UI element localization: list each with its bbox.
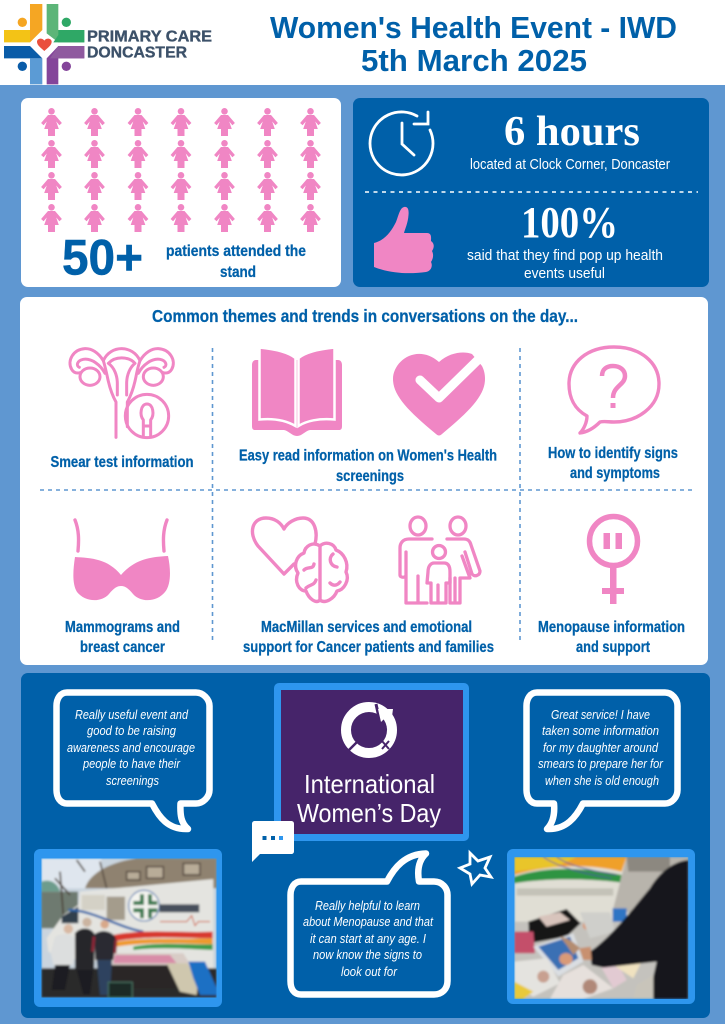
icon: bra [73,520,170,600]
icon: open book [252,348,342,436]
quote bubble: useful event: awareness and encourage [67,740,195,755]
caption: patients attended the stand: stand [220,264,256,281]
title: Women's Health Event - IWD [270,10,677,45]
quote bubble: useful event: screenings [106,773,159,788]
quote bubble: great service [526,692,678,829]
heading: common themes: Common themes and trends in conversations on the day... [152,306,578,326]
icon: thumbs up [374,207,434,273]
text: International Women's Day: Women’s Day [297,798,441,828]
quote bubble: great service: taken some information [542,723,659,738]
label: signs and symptoms: How to identify signs [548,445,678,462]
logo: Primary Care Doncaster: PRIMARY CARE [87,28,212,46]
title [270,10,677,78]
quote bubble: great service: smears to prepare her for [538,756,664,771]
quote bubble: useful event: people to have their [82,756,181,771]
icon: clock [370,112,433,175]
label: mammograms: Mammograms and [65,619,180,636]
icon: chat bubble [252,821,294,862]
quote bubble: menopause [290,854,448,994]
quote bubble: useful event [56,692,210,829]
stat: 100%: 100% [521,198,618,247]
logo: Primary Care Doncaster [4,4,212,84]
text: International Women's Day: International [304,769,435,799]
quote bubble: menopause: about Menopause and that [303,914,434,929]
caption: patients attended the stand [166,243,306,281]
quote bubble: great service: when she is old enough [545,773,659,788]
logo: Primary Care Doncaster: DONCASTER [87,44,187,61]
quote bubble: menopause: now know the signs to [313,947,422,962]
title: 5th March 2025 [361,43,587,78]
stat: 6 hours: 6 hours [504,109,640,155]
quote bubble: menopause: Really helpful to learn [315,898,420,913]
label: menopause: and support [576,639,650,656]
quote bubble: great service: Great service! I have [551,707,650,722]
photo: leaflets on stand [507,849,695,1004]
label: MacMillan services [243,619,494,656]
label: menopause [538,619,685,656]
caption: pop up events useful [467,248,663,282]
photo: van and staff [34,849,222,1007]
quote bubble: menopause: it can start at any age. I [310,931,426,946]
label: MacMillan services: support for Cancer patients and families [243,639,494,656]
quote bubble: useful event: Really useful event and [75,707,189,722]
caption: patients attended the stand: patients attended the [166,243,306,260]
label: mammograms: breast cancer [80,639,165,656]
panel: patients attended [21,98,341,287]
quote bubble: menopause: look out for [341,964,398,979]
icon: speech bubble question [569,347,659,433]
quote bubble: great service: for my daughter around [543,740,659,755]
icon: IWD symbol [346,704,393,753]
label: MacMillan services: MacMillan services and emotional [261,619,472,636]
label: menopause: Menopause information [538,619,685,636]
quote bubble: useful event: good to be raising [87,723,177,738]
icon: heart with tick [393,352,486,436]
big number 50+: 50+ [62,230,143,286]
icon: heart and brain [252,518,347,601]
icon: grid of women pictograms [41,108,321,232]
IWD logo frame [274,683,469,841]
label: easy read information: screenings [336,468,404,485]
label: signs and symptoms: and symptoms [570,465,660,482]
label: signs and symptoms [548,445,678,482]
caption: location: located at Clock Corner, Doncaster [470,157,670,173]
label: easy read information [239,448,497,485]
panel: hours and usefulness [353,98,709,287]
label: smear test: Smear test information [50,454,194,471]
panel: patient feedback [21,673,710,1018]
caption: pop up events useful: events useful [524,266,605,282]
label: easy read information: Easy read information on Women's Health [239,448,497,464]
label: mammograms [65,619,180,656]
icon: female symbol with pause [590,516,638,604]
icon: uterus and swab [70,349,173,438]
caption: pop up events useful: said that they find pop up health [467,248,663,264]
icon: star [460,853,491,884]
text: International Women's Day [297,769,441,828]
icon: family [400,517,480,603]
panel: common themes [20,297,708,665]
